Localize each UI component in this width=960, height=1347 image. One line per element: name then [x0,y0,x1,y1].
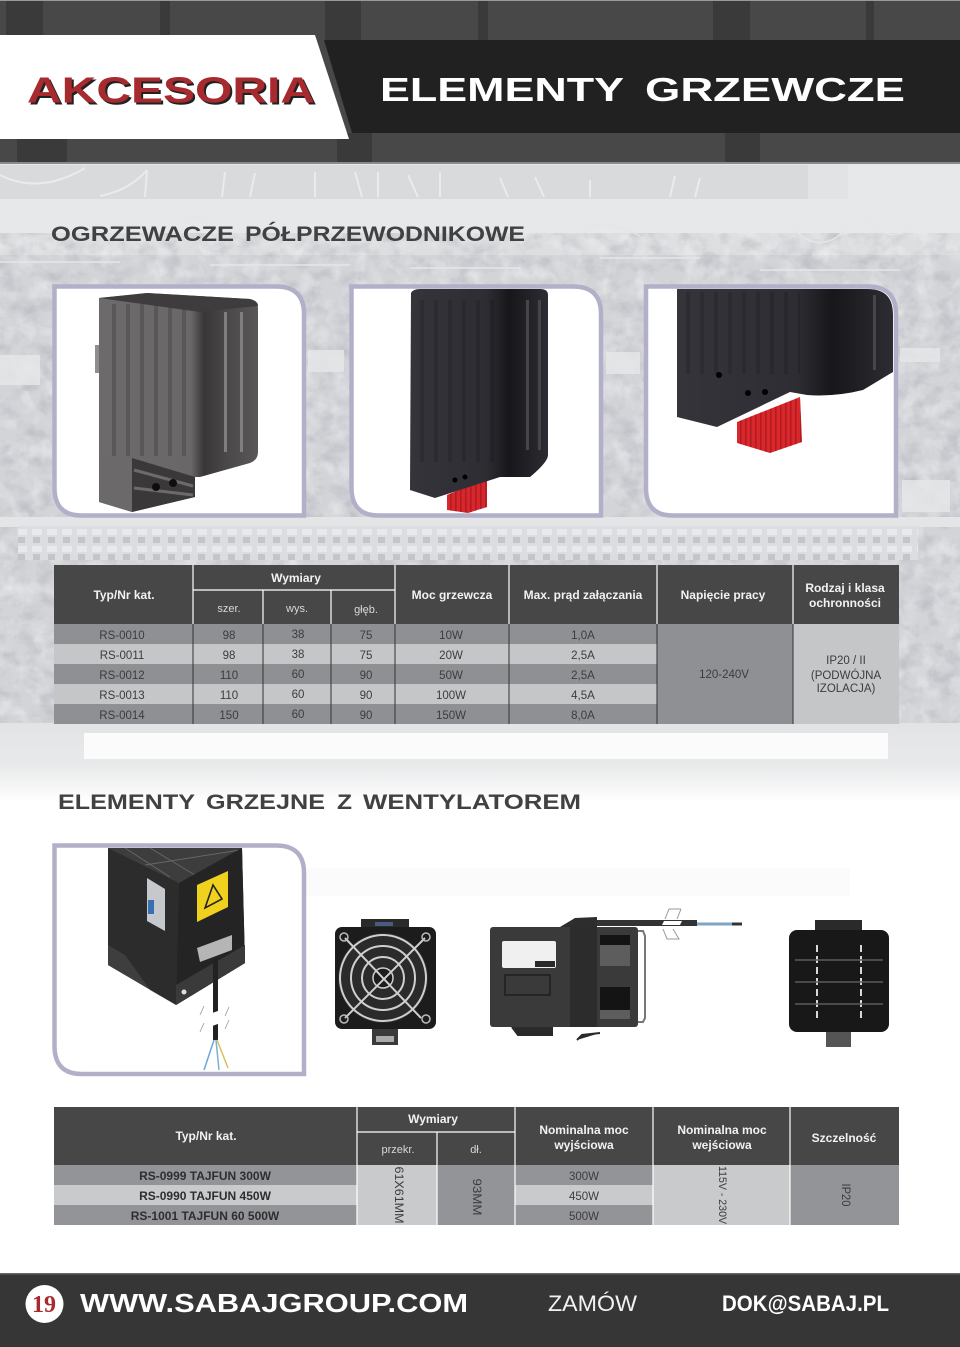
section heading: semiconductor heaters [51,222,525,246]
table rows: 2,5A [571,670,595,682]
table rows: 8,0A [571,710,595,722]
table rows: IP20 [839,1184,851,1206]
table rows: RS-0010 [99,630,145,642]
table header labels: Wymiary [271,571,321,585]
table header labels: wejściowa [691,1138,752,1152]
table: semiconductor heaters [54,565,899,724]
table: fan heaters [54,1107,899,1225]
table header labels: Moc grzewcza [412,588,493,602]
section heading: semiconductor heaters: PÓŁPRZEWODNIKOWE [245,222,525,246]
table rows: 10W [439,630,463,642]
page number badge: 19 [32,1292,56,1318]
section heading: fan heaters: GRZEJNE [206,791,325,814]
table header labels: dł. [470,1144,482,1156]
section heading: fan heaters: Z [337,791,352,814]
table header labels: głęb. [354,604,378,616]
table rows: 90 [360,710,372,722]
heater 1 body [95,293,258,512]
table rows: 4,5A [571,690,595,702]
table header labels: Typ/Nr kat. [175,1129,237,1143]
heater 2 red terminal [447,478,487,513]
product panel: heater 2 [352,286,601,516]
section heading: fan heaters [58,791,581,814]
table rows: 90 [360,690,372,702]
table header labels: szer. [217,603,241,615]
section heading: semiconductor heaters: OGRZEWACZE [51,223,234,246]
table rows: 20W [439,650,463,662]
table header labels: Max. prąd załączania [524,588,643,602]
table rows: 98 [223,650,235,662]
table rows [99,629,881,722]
heater 3 body [677,289,893,427]
table header labels [93,571,885,616]
header band [0,0,960,164]
table rows: 38 [292,629,304,641]
page background texture [0,163,960,896]
table header labels: Typ/Nr kat. [93,588,155,602]
table rows: RS-0011 [100,650,144,662]
table rows: 38 [292,649,304,661]
table header labels: Napięcie pracy [681,588,766,602]
table rows: IZOLACJA) [817,683,876,695]
table rows: 500W [569,1211,599,1223]
table header labels: Wymiary [408,1112,458,1126]
table rows: 75 [360,630,372,642]
fan heater front view [335,919,436,1045]
table rows: 115V - 230V [716,1166,728,1225]
table rows: 150 [219,710,239,722]
table rows: 2,5A [571,650,595,662]
table rows: RS-0013 [99,690,145,702]
product panel: heater 3 [646,286,896,516]
heading: AKCESORIA: AKCESORIA [27,70,315,110]
fan heater rear view [789,920,889,1047]
fan heater body [108,848,245,1070]
table rows: 100W [436,690,466,702]
table rows: 61X61MM [392,1166,406,1224]
table rows: RS-0990 TAJFUN 450W [139,1189,272,1203]
table rows: 120-240V [699,669,749,681]
table rows: IP20 / II [826,655,866,667]
page number badge [26,1285,64,1323]
table rows [131,1166,851,1225]
fan heater side view [490,909,742,1040]
table rows: 98 [223,630,235,642]
table header labels: Szczelność [812,1131,877,1145]
heading: ELEMENTY GRZEWCZE: ELEMENTY [380,71,624,108]
table rows: RS-0014 [99,710,145,722]
table rows: 150W [436,710,466,722]
table header labels: Nominalna moc [677,1123,767,1137]
heater 3 red terminal [737,397,802,453]
table rows: 300W [569,1171,599,1183]
table rows: RS-1001 TAJFUN 60 500W [131,1209,280,1223]
table rows: 110 [220,690,238,702]
heading: AKCESORIA: AKCESORIA [29,72,317,112]
order label: ZAMÓW [548,1291,637,1316]
heater 2 body [410,289,548,498]
table rows: 110 [220,670,238,682]
product panel: fan heater [54,846,304,1074]
section heading: fan heaters: WENTYLATOREM [363,791,581,814]
table rows: 90 [360,670,372,682]
table rows: RS-0999 TAJFUN 300W [139,1169,272,1183]
table header labels: Nominalna moc [539,1123,629,1137]
table header labels: wys. [285,603,308,615]
heading: ELEMENTY GRZEWCZE: GRZEWCZE [645,71,905,108]
website: WWW.SABAJGROUP.COM [80,1288,468,1318]
table rows: 75 [360,650,372,662]
table header labels: ochronności [809,596,881,610]
email: DOK@SABAJ.PL [722,1291,889,1316]
table rows: 93MM [470,1178,484,1216]
section heading: fan heaters: ELEMENTY [58,791,195,814]
table header labels [175,1112,877,1156]
table rows: 1,0A [571,630,595,642]
footer band [0,1273,960,1347]
product panel: heater 1 [54,286,304,516]
table rows: 450W [569,1191,599,1203]
table header labels: przekr. [381,1144,415,1156]
table rows: 50W [439,670,463,682]
heading: ELEMENTY GRZEWCZE [380,71,905,108]
table header labels: wyjściowa [553,1138,614,1152]
table rows: RS-0012 [99,670,145,682]
table rows: 60 [292,689,304,701]
table header labels: Rodzaj i klasa [805,581,885,595]
table rows: 60 [292,669,304,681]
table rows: (PODWÓJNA [811,669,881,682]
table rows: 60 [292,709,304,721]
